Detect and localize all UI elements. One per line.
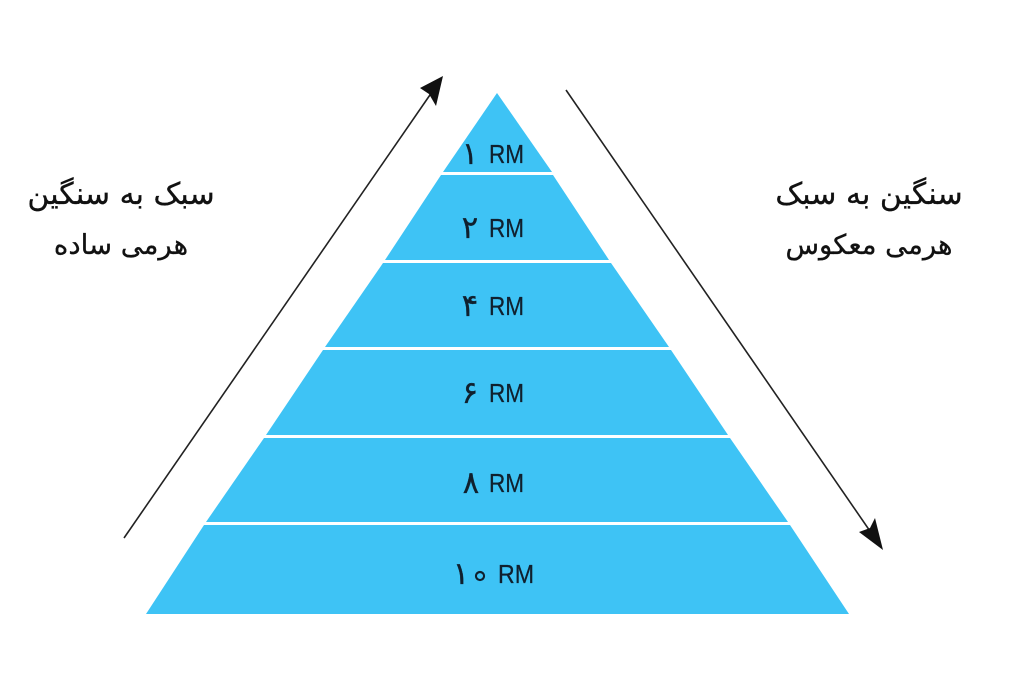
label: 2 RM: [462, 210, 524, 246]
tier: 6 RM: [266, 350, 728, 435]
tier: 10 RM: [146, 525, 849, 614]
label: 6 RM: ۶: [462, 375, 478, 411]
label: 4 RM: RM: [489, 291, 524, 321]
label: 4 RM: [462, 288, 524, 324]
tier: 4 RM: [325, 263, 669, 347]
label: 10 RM: ۰: [472, 556, 488, 592]
label: 1 RM: [462, 136, 524, 172]
text: left caption: سبک به سنگین: [27, 177, 215, 212]
tier: 2 RM: [385, 175, 609, 260]
arrow: down right side: [566, 90, 883, 550]
label: 10 RM: RM: [498, 559, 534, 589]
label: 6 RM: RM: [489, 378, 524, 408]
pyramid: [146, 93, 849, 614]
text: right caption: هرمی معکوس: [785, 229, 953, 261]
label: 8 RM: ۸: [463, 465, 479, 501]
text: right caption: سنگین به سبک: [775, 177, 963, 212]
label: 8 RM: RM: [489, 468, 524, 498]
label: 10 RM: ۱: [453, 556, 469, 592]
text: right caption: [775, 177, 963, 261]
label: 1 RM: RM: [489, 139, 524, 169]
tier: 8 RM: [206, 438, 788, 522]
label: 6 RM: [462, 375, 524, 411]
arrow: up left side: [124, 76, 443, 538]
label: 4 RM: ۴: [462, 288, 478, 324]
label: 1 RM: ۱: [462, 136, 478, 172]
label: 2 RM: RM: [489, 213, 524, 243]
label: 8 RM: [463, 465, 524, 501]
tier: 1 RM: [443, 93, 552, 172]
text: left caption: [27, 177, 215, 261]
label: 10 RM: [453, 556, 534, 592]
text: left caption: هرمی ساده: [54, 229, 188, 261]
label: 2 RM: ۲: [462, 210, 478, 246]
